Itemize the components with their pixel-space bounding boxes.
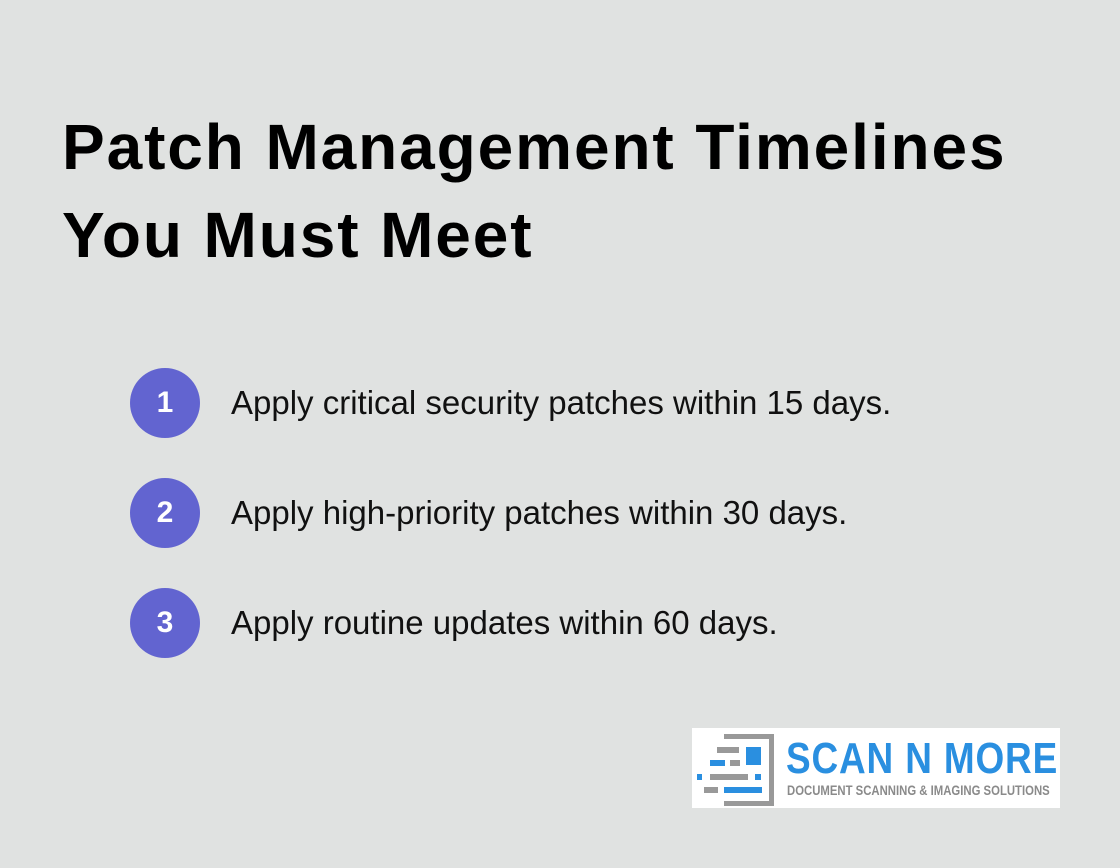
title: You Must Meet [62, 199, 534, 271]
number badge 2 [130, 478, 200, 548]
title: Patch Management Timelines [62, 111, 1006, 183]
list item 1 [130, 368, 891, 438]
title [62, 111, 1006, 271]
list item 2 [130, 478, 847, 548]
item text 3: Apply routine updates within 60 days. [231, 604, 778, 641]
item text 2: Apply high-priority patches within 30 days. [231, 494, 847, 531]
item text 1: Apply critical security patches within 15 days. [231, 384, 891, 421]
number badge 2: 2 [157, 496, 173, 529]
number badge 3 [130, 588, 200, 658]
number badge 1: 1 [157, 386, 173, 419]
logo icon [697, 734, 774, 806]
number badge 3: 3 [157, 606, 173, 639]
list item 3 [130, 588, 778, 658]
logo name: SCAN N MORE [786, 734, 1058, 783]
number badge 1 [130, 368, 200, 438]
logo tagline: DOCUMENT SCANNING & IMAGING SOLUTIONS [787, 782, 1050, 798]
logo [692, 728, 1060, 808]
